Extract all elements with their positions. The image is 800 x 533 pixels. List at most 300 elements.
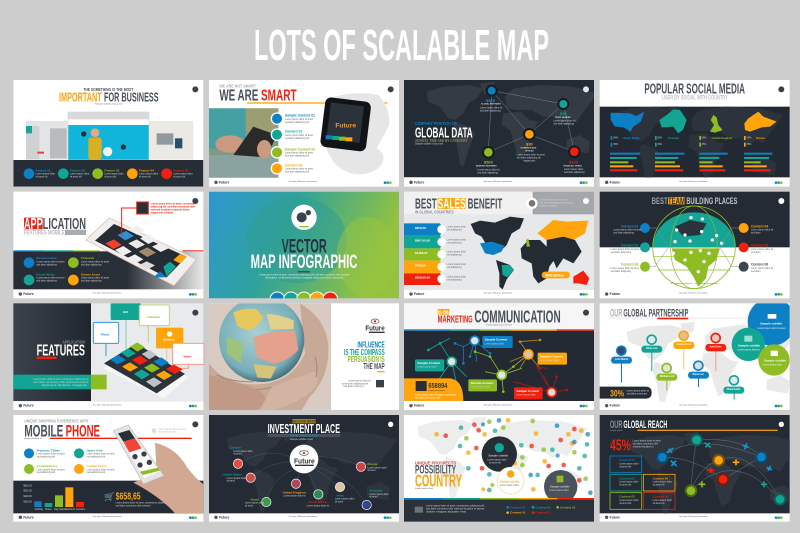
heading: BEST [652, 196, 668, 206]
info note: sed adipiscing elit [158, 431, 177, 434]
value bars: sed adipiscing [447, 267, 462, 269]
text block: sed diam nonummy [343, 386, 364, 388]
country labels [223, 446, 389, 508]
box labels: sit amet elit [619, 465, 631, 468]
world map [627, 322, 797, 407]
heading: POSSIBILITY [415, 463, 456, 477]
people pins: Olivia Smith [727, 388, 741, 391]
content items [611, 223, 774, 273]
value bars: $897,65.00 [415, 239, 430, 243]
dark panel: sed diam adipiscing [81, 264, 102, 266]
nodes: $100 [569, 159, 579, 164]
heading: APPLICATION [62, 339, 85, 344]
info note: Lorem ipsum dolor sit amet [158, 428, 186, 431]
value bars [404, 223, 466, 285]
heading: UNIQUE PROSPECTS [415, 461, 456, 466]
value bars: Lorem ipsum dolor [447, 226, 466, 229]
stat: euismod tincidunt ut [633, 446, 654, 449]
stat: sed diam nonummy nibh [633, 444, 659, 446]
world map [417, 417, 587, 502]
sales total [104, 492, 169, 507]
country stats: United States [623, 136, 640, 140]
nodes [476, 85, 585, 174]
heading: VECTOR [282, 236, 327, 257]
bar chart: $300.00 [23, 501, 32, 503]
hand holding phone [113, 425, 203, 513]
heading: Sample subtitle [610, 429, 622, 432]
slide: global partnership [600, 298, 797, 410]
people pins: Oliver Lee [646, 348, 658, 350]
product list: Lorem ipsum dolor sit amet [87, 468, 115, 471]
title: LOTS OF SCALABLE MAP [254, 21, 549, 70]
bar chart [23, 485, 86, 511]
nodes: GLOBAL PARTNERS [481, 103, 501, 106]
bar chart: Day Sales [54, 509, 66, 511]
nodes: sed diam adipiscing [553, 124, 574, 126]
slide: application features [13, 303, 204, 410]
heading [251, 236, 357, 280]
heading [415, 197, 502, 215]
content items: Lorem ipsum dolor sit [751, 267, 774, 270]
heading: SMART [261, 88, 297, 105]
footer [19, 515, 197, 519]
country stats: 65% [657, 137, 662, 139]
content list: sed diam adipiscing elit [285, 137, 309, 140]
product list: Hyper Sofa [87, 448, 103, 452]
nodes: sed diam adipiscing [480, 110, 501, 112]
heading: laoreet dolore magna [42, 384, 88, 387]
dark panel: Lorem ipsum dolor sit amet [81, 260, 109, 263]
value bars: sed adipiscing [447, 230, 462, 232]
world map [427, 82, 597, 167]
stat badge: 658894 [428, 381, 448, 390]
heading: THE SOMETHING IS THE MOST [83, 87, 133, 92]
country labels: Lorem ipsum dolor sit [307, 505, 329, 508]
bar chart: $500.00 [23, 491, 32, 493]
text block [342, 380, 384, 388]
people pins: Annie Prince [677, 343, 692, 346]
nodes: $50 [560, 111, 567, 116]
content boxes [610, 456, 675, 509]
heading: WE ARE NOT SMART [219, 84, 256, 89]
sales total: sed diam nonummy nibh euismod [116, 505, 151, 507]
box labels [619, 458, 672, 505]
content list: sed diam adipiscing elit [285, 171, 309, 174]
footer: Your topic of Business presentation [679, 292, 708, 295]
product list: Premium T-Shirt [37, 448, 60, 452]
content list: Lorem ipsum dolor sit amet [285, 134, 313, 137]
heading: FEATURES MOBILE [24, 231, 65, 237]
circles: Sample subtitle [760, 322, 782, 326]
nodes: FINANCIAL THINKS [563, 164, 583, 167]
country stats: Australia [668, 136, 680, 140]
heading: UNIQUE SHOPPING EXPERIENCE WITH [24, 418, 88, 423]
connectors [238, 453, 367, 505]
heading: Sample subtitle of text [415, 487, 433, 490]
website screens [26, 112, 193, 160]
feature band: sit amet elit [173, 175, 185, 178]
heading: WE ARE [219, 88, 258, 105]
footer: Your topic of Business presentation [93, 292, 121, 295]
legend: Content 01 [535, 511, 551, 515]
product list: Lorem ipsum dolor sit amet [37, 468, 65, 471]
box labels: Content 03 [619, 495, 635, 499]
box labels: Lorem ipsum dolor [619, 462, 639, 465]
bar chart: $400.00 [23, 496, 32, 498]
nodes: $585 [486, 98, 496, 103]
dark panel: Lorem ipsum dolor sit amet [36, 260, 65, 263]
people pins: Michale Lord [660, 376, 675, 378]
phone with app tiles [103, 342, 188, 399]
heading: Sample subtitle of text [290, 438, 313, 441]
slide: vector map infographic [209, 192, 399, 307]
info box: euismod tincidunt [539, 205, 558, 208]
circles: Lorem ipsum dolor sit amet [757, 327, 786, 330]
heading [33, 339, 89, 387]
legend: Content 01 [510, 505, 526, 509]
feature band: Lorem ipsum dolor [70, 173, 90, 176]
product list: Lorem ipsum dolor sit amet [37, 453, 65, 456]
people pins: Diana Lee [693, 374, 704, 376]
heading: LICATION [43, 216, 86, 233]
dark band: dolore magna aliquam erat [426, 511, 466, 514]
nodes: Lorem ipsum dolor sit [480, 106, 503, 109]
heading [24, 418, 192, 440]
connectors [488, 91, 574, 152]
product list: sed adipiscing elit [37, 455, 55, 458]
footer: Your topic of Business presentation [679, 403, 708, 406]
feature band: Lorem ipsum dolor [173, 173, 193, 176]
country labels: South Africa [309, 500, 327, 504]
slide: we are smart [209, 80, 399, 187]
heading: GLOBAL DATA [415, 125, 473, 141]
feature band: sit amet elit [70, 175, 82, 178]
dark band [404, 498, 594, 522]
country labels: Lorem ipsum dolor [233, 450, 253, 453]
nodes: $30 [526, 142, 533, 147]
product list: Cooktail Dress [37, 464, 58, 468]
footer: Your topic of Business presentation [288, 180, 317, 183]
heading: GLOBAL PARTNERSHIP [623, 307, 688, 319]
icon: globe badge [291, 205, 317, 230]
box labels: sit amet elit [619, 484, 631, 487]
content cards: Sample Content [485, 338, 507, 342]
heading: PHONE [66, 421, 100, 440]
feature cards: Photo [101, 333, 110, 337]
world map [227, 428, 397, 513]
nodes: Lorem ipsum dolor [564, 168, 584, 171]
country labels: sit amet [335, 500, 344, 503]
value bars: Lorem ipsum dolor [447, 251, 466, 254]
heading [652, 196, 737, 206]
logo [365, 319, 385, 333]
slide: globe in hands [209, 297, 399, 410]
heading: BENEFIT [468, 197, 502, 213]
heading: sed diam nonummy nibh euismod tincidunt [33, 381, 89, 384]
circles: Lorem ipsum dolor [763, 364, 782, 367]
feature circles: sit amet elit [489, 461, 501, 464]
heading: OUR [610, 307, 622, 319]
heading [24, 216, 86, 237]
footer [409, 180, 588, 184]
content cards: Lorem ipsum dolor [471, 386, 490, 389]
heading [268, 419, 340, 441]
nodes: magna erat [523, 159, 535, 162]
dark panel: sed diam adipiscing [36, 264, 57, 266]
feature cards: Video [183, 354, 192, 358]
world map [630, 432, 800, 517]
callout: euismod tincidunt ut laoreet dolore [151, 208, 190, 211]
quote: INFLUENCE [357, 340, 385, 350]
dark panel: Games Asset [81, 272, 100, 276]
sales total: $658,65 [116, 492, 141, 503]
feature cards: Calendar [147, 315, 161, 319]
dark band: sed diam nonummy nibh euismod tincidunt ut laoreet [426, 508, 485, 511]
dark panel: Lorem ipsum dolor sit amet [36, 277, 65, 280]
content cards: Lorem ipsum dolor [516, 394, 536, 397]
footer: Future [219, 180, 230, 184]
country labels: United Kingdom [283, 490, 306, 494]
value bars: $788,56 [415, 263, 426, 267]
heading: FROM YOUR OFFICE [290, 434, 318, 438]
connectors [649, 228, 739, 267]
heading: FOR BUSINESS [104, 90, 159, 105]
feature band: Feature 05 [173, 169, 189, 173]
feature circles: Sample subtitle [488, 454, 508, 458]
text block: consectetur adipiscing elit [342, 382, 369, 385]
quote: PERSUASION IS [348, 354, 385, 364]
content items: sed diam [751, 233, 761, 235]
feature circles: Sample subtitle [500, 480, 520, 484]
plane icons [667, 443, 772, 487]
nodes: STAFF MEMBER [555, 116, 571, 119]
heading: COUNTRY [415, 470, 462, 490]
footer: Your topic of Business presentation [288, 515, 317, 518]
sales total: Lorem ipsum dolor sit amet, consectetur adipiscing [116, 501, 169, 504]
slide: important for business [13, 80, 203, 187]
footer [605, 292, 783, 296]
box labels: sit amet elit [653, 484, 665, 487]
nodes: sed diam adipiscing [564, 172, 585, 174]
callout: Lorem ipsum dolor sit amet, consectetur [151, 202, 196, 205]
bar charts [610, 153, 772, 171]
quote: THE MAP [363, 361, 385, 371]
footer [605, 515, 783, 519]
footer: Your topic of Business presentation [483, 403, 512, 406]
box labels: Content 02 [619, 476, 635, 480]
network [428, 338, 567, 392]
country labels: sit amet [367, 469, 376, 472]
value bars: $1458,22 [415, 251, 428, 255]
stat: 45% [610, 437, 631, 454]
feature cards: Gift [123, 310, 128, 314]
product list: sed adipiscing elit [87, 455, 105, 458]
footer: Future [23, 292, 34, 296]
legend: Content 01 [560, 505, 576, 509]
heading [610, 419, 778, 432]
content cards [415, 336, 567, 399]
feature band: Lorem ipsum dolor [139, 173, 159, 176]
slide: best team building places [600, 192, 790, 298]
footer [214, 180, 392, 184]
hubs [656, 434, 786, 506]
product list: sed adipiscing elit [37, 471, 55, 474]
heading: GLOBAL BUSINESS [438, 310, 473, 316]
country labels: Lorem ipsum dolor [369, 493, 389, 496]
footer: Your topic of Business presentation [483, 180, 512, 183]
quote: IS THE COMPASS [344, 347, 385, 357]
footer [404, 290, 594, 298]
quote [344, 340, 385, 372]
content items: Content 04 [751, 224, 768, 228]
people pins: John Martin [615, 358, 629, 361]
footer: Your topic of Business presentation [93, 515, 121, 518]
feature circles: Sample subtitle [550, 484, 570, 488]
country labels: Canada [230, 446, 241, 450]
content items: Lorem ipsum dolor sit amet [611, 267, 639, 270]
slide: global data [404, 80, 597, 187]
content list: Sample Content 03 [285, 147, 315, 151]
content list: Content 02 [285, 130, 302, 134]
content list: Sample Content 01 [285, 114, 315, 118]
country labels: Lorem ipsum dolor [227, 477, 246, 480]
content items: sed diam [751, 271, 761, 273]
value bars: Lorem ipsum dolor [447, 263, 466, 266]
country stats: United Kingdom [712, 136, 733, 140]
heading: IMPORTANT [59, 90, 102, 105]
content cards: Sample Content [516, 389, 539, 393]
legend: Content 01 [510, 511, 526, 515]
country stats: 35% [613, 144, 618, 146]
content cards: Sample Content [471, 381, 493, 385]
bar chart: Furniture [76, 508, 86, 511]
feature band: Lorem ipsum dolor [104, 173, 124, 176]
stat pill: sed diam nonummy [627, 394, 648, 396]
feature circles [482, 436, 577, 503]
country stats: 35% [747, 144, 751, 146]
content items: Content 06 [751, 263, 768, 267]
value bars: sed adipiscing [447, 242, 462, 244]
content list: sed diam adipiscing elit [285, 121, 309, 124]
box labels: sit amet elit [653, 502, 665, 505]
nodes: sed diam adipiscing [477, 172, 498, 174]
country labels: sit amet [245, 504, 254, 507]
content items: Content 02 [621, 244, 638, 248]
routes [667, 439, 777, 495]
heading: ACROSS TIME AND BY CATEGORY [415, 138, 468, 143]
circles: Lorem ipsum dolor sit [737, 349, 760, 352]
country stats: 35% [702, 144, 706, 146]
background map [618, 106, 782, 178]
footer: Future [23, 515, 34, 519]
country labels: Lorem ipsum dolor [245, 502, 265, 505]
country labels: India [337, 493, 344, 497]
heading [415, 461, 462, 490]
stat badge: People achievement [428, 389, 445, 392]
info box [526, 198, 575, 209]
circles: Sample subtitle [738, 344, 760, 348]
country labels: Brazil [251, 497, 259, 501]
dark panel: sed diam adipiscing [36, 281, 57, 283]
heading: IN GLOBAL COUNTRIES [415, 209, 454, 215]
content list: Lorem ipsum dolor sit amet [285, 152, 313, 155]
footer [409, 403, 588, 408]
heading: Sample subtitle of your text here [486, 323, 512, 326]
heading: MOBILE [24, 421, 63, 440]
country labels: Russia [367, 462, 377, 466]
stat pill [600, 387, 652, 399]
heading: Lorem ipsum dolor sit amet, consectetur adipiscing elit, sed diam nonummy nibh euismod [259, 274, 350, 277]
stat badge: sed diam nonummy nibh [415, 397, 441, 399]
feature band: sit amet elit [104, 175, 116, 178]
photo: hands and globe [209, 297, 331, 410]
stat badge: Lorem ipsum dolor sit amet, consectetur [415, 393, 457, 396]
country stats: 65% [702, 137, 706, 139]
content items: sed diam adipiscing [611, 271, 632, 273]
feature band: Feature 02 [70, 169, 85, 173]
heading: Sample subtitle of text [24, 437, 43, 440]
bar chart: Clothing [34, 508, 44, 511]
dark panel [13, 250, 203, 289]
heading: INVESTMENT PLACE [268, 422, 340, 436]
logo badge: Future [294, 456, 315, 465]
sales total: 🛒 [104, 492, 115, 502]
feature band: Feature 01 [36, 169, 51, 173]
nodes: INTERNATIONAL [521, 147, 538, 150]
content cards: Lorem ipsum dolor [485, 342, 504, 345]
country labels: Lorem ipsum dolor [367, 466, 387, 469]
bar chart: Shoes [45, 509, 52, 511]
value bars: $358,00.00 [415, 276, 430, 280]
nodes: $500 [484, 160, 494, 165]
footer [605, 403, 783, 408]
footer: Future [610, 292, 620, 296]
heading: BEST [415, 197, 437, 213]
heading: BUILDING PLACES [686, 196, 737, 206]
country stats: 65% [747, 137, 751, 139]
slide: our global reach [600, 415, 800, 522]
country labels: sit amet [227, 480, 235, 483]
heading [438, 306, 561, 326]
content items: sed diam adipiscing [613, 233, 634, 235]
marker dots [434, 418, 593, 495]
country labels: United States [223, 473, 242, 477]
nodes: Lorem ipsum dolor sit amet [517, 153, 545, 156]
heading: GLOBAL REACH [623, 419, 667, 431]
stat pill: 30% [610, 389, 625, 399]
feature band: Feature 04 [139, 169, 154, 173]
heading: Sample subtitle of your text [415, 142, 443, 145]
footer: Future [610, 404, 620, 408]
callout: magna erat volutpat [151, 211, 173, 214]
content items: Lorem ipsum dolor sit [751, 229, 774, 232]
bar chart: Electronic [65, 508, 76, 511]
box labels: Content 04 [653, 476, 668, 480]
heading: MAP INFOGRAPHIC [251, 252, 357, 273]
country stats: 35% [657, 144, 662, 146]
content cards: Sample Content [417, 361, 440, 365]
world map: $650 Billion [545, 273, 564, 277]
dark panel: Social Media [36, 272, 55, 276]
feature band: sit amet elit [139, 175, 151, 178]
content list: Lorem ipsum dolor sit amet [285, 118, 313, 121]
feature circles: Lorem ipsum dolor [500, 484, 520, 487]
footer: Your topic of Business presentation [679, 515, 708, 518]
content items: Content 03 [621, 263, 638, 267]
value bars: Lorem ipsum dolor [447, 238, 466, 241]
footer: Your topic of Business presentation [483, 292, 512, 295]
maps [611, 109, 777, 133]
